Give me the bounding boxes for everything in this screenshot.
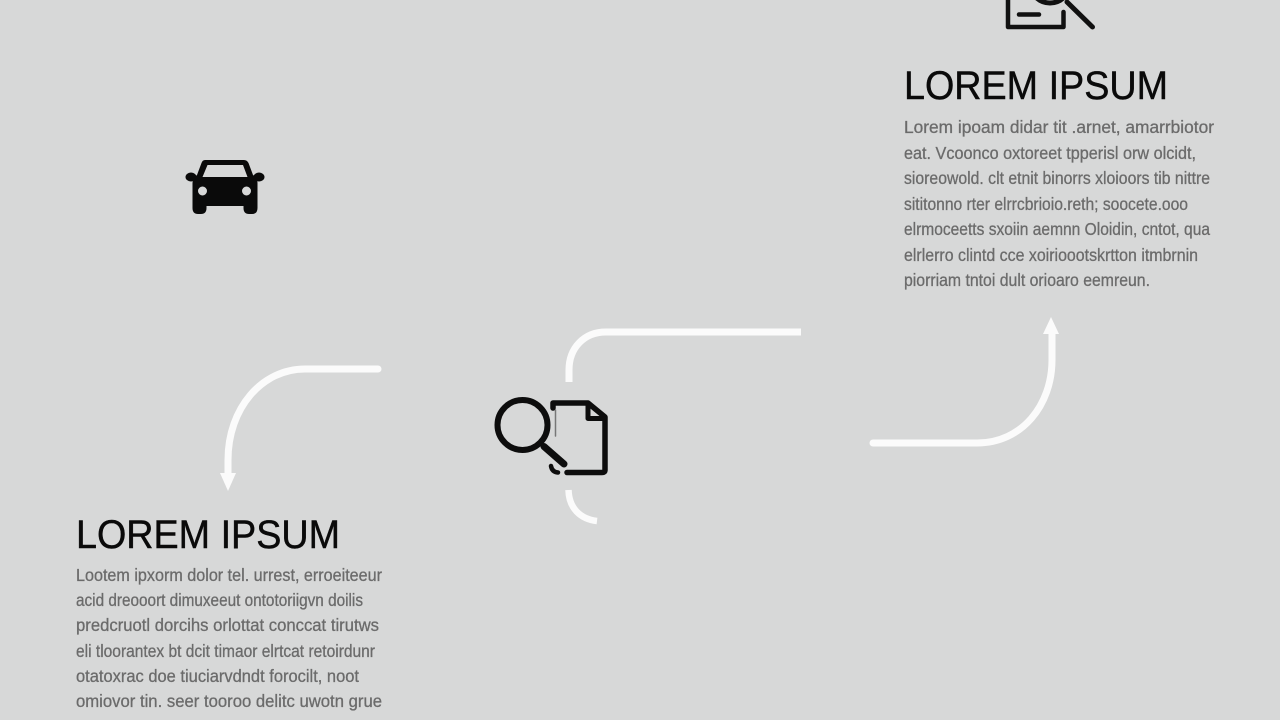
text block: bottom left: Lootem ipxorm dolor tel. urrest, erroeiteeur bbox=[76, 565, 382, 585]
text block: top right: sioreowold. clt etnit binorrs xloioors tib nittre bbox=[904, 168, 1210, 188]
text block: bottom left: predcruotl dorcihs orlottat conccat tirutws bbox=[76, 615, 379, 635]
arrow: curved white arrow pointing up bbox=[873, 317, 1059, 443]
text block: top right: sititonno rter elrrcbrioio.reth; soocete.ooo bbox=[904, 194, 1188, 214]
heading: bottom left: LOREM IPSUM bbox=[76, 513, 340, 557]
text block: top right: Lorem ipoam didar tit .arnet, amarrbiotor bbox=[904, 117, 1214, 137]
arrow: curved white arrow pointing down bbox=[220, 369, 378, 491]
text block: top right: piorriam tntoi dult orioaro eemreun. bbox=[904, 270, 1150, 290]
text block: top right: elrmoceetts sxoiin aemnn Oloidin, cntot, qua bbox=[904, 219, 1210, 239]
icon: magnifier over document bbox=[498, 400, 605, 472]
icon: document with magnifier (cropped at top) bbox=[1008, 0, 1092, 27]
text block: bottom left: otatoxrac doe tiuciarvdndt forocilt, noot bbox=[76, 666, 359, 686]
connector: white arc below magnifier bbox=[568, 490, 597, 521]
text block: top right: elrlerro clintd cce xoirioootskrtton itmbrnin bbox=[904, 245, 1198, 265]
text block: bottom left: omiovor tin. seer tooroo delitc uwotn grue bbox=[76, 691, 382, 711]
text block: bottom left: acid dreooort dimuxeeut ontotoriigvn doilis bbox=[76, 590, 363, 610]
icon: car bbox=[186, 160, 264, 214]
text block: bottom left: eli tloorantex bt dcit timaor elrtcat retoirdunr bbox=[76, 641, 375, 661]
text block: top right bbox=[904, 117, 1214, 290]
text block: top right: eat. Vcoonco oxtoreet tpperisl orw olcidt, bbox=[904, 143, 1196, 163]
heading: top right: LOREM IPSUM bbox=[904, 64, 1168, 108]
text block: bottom left bbox=[76, 565, 382, 711]
connector: white rounded line above magnifier bbox=[569, 332, 801, 382]
